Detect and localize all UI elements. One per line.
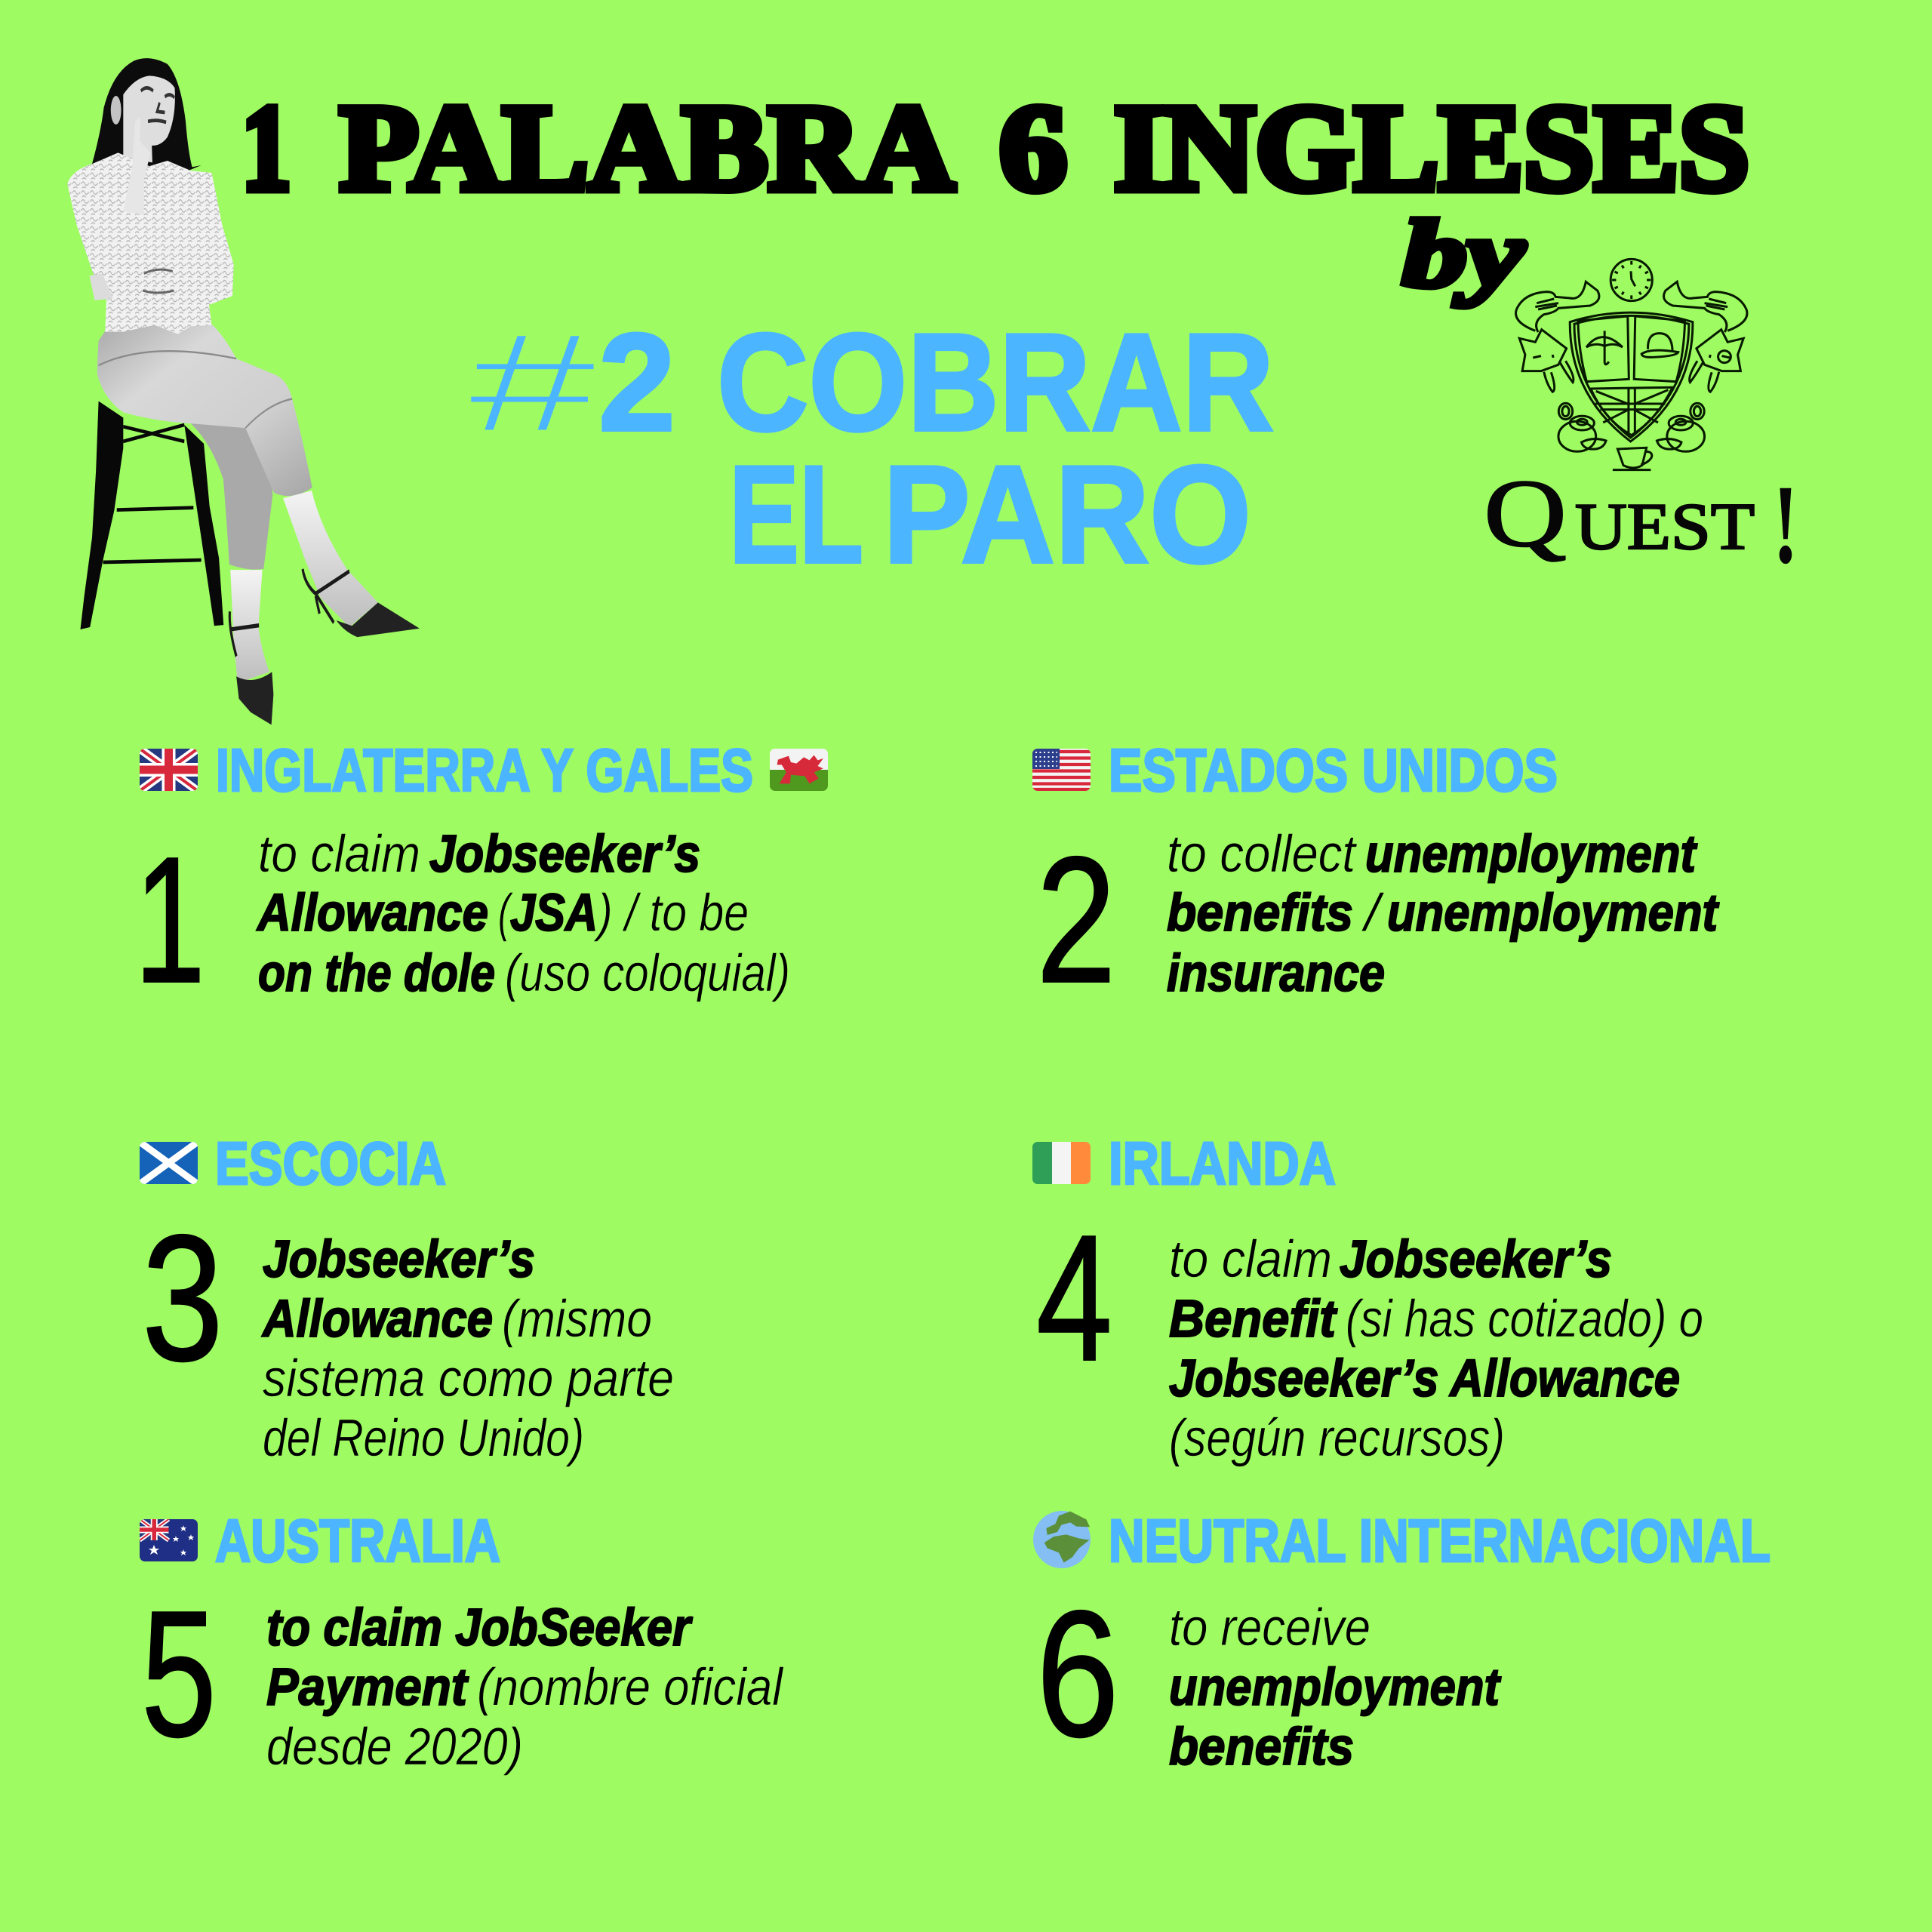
stool (80, 401, 223, 629)
blouse folds (143, 269, 174, 293)
heading: Neutral internacional: NEUTRAL INTERNACIONAL (1109, 1507, 1770, 1574)
foxes (1516, 281, 1599, 392)
shoes (229, 569, 420, 724)
folded hand (90, 273, 113, 300)
title: INGLESES (1114, 80, 1749, 217)
description: ) / to be (593, 883, 749, 942)
logo: Quest crest (1484, 259, 1798, 587)
icon: globe (1033, 1511, 1091, 1568)
subtitle: #2 cobrar el paro: COBRAR (717, 304, 1274, 460)
description: to claim (258, 824, 420, 883)
subtitle: #2 cobrar el paro: # (465, 305, 596, 461)
lace blouse (67, 152, 234, 334)
description: sistema como parte (263, 1349, 674, 1407)
title: PALABRA (340, 80, 955, 217)
by: by (1402, 200, 1526, 307)
title: 6 (999, 80, 1067, 217)
description: desde 2020) (266, 1717, 523, 1776)
legs and feet skin (230, 491, 378, 683)
number 1: 1 (134, 820, 205, 1020)
description: (mismo (502, 1289, 652, 1348)
heading: Inglaterra y Gales: INGLATERRA Y GALES (216, 737, 753, 804)
description: (nombre oficial (477, 1657, 784, 1716)
panel: Inglaterra y Gales (140, 748, 828, 1002)
description: Benefit (1169, 1289, 1337, 1348)
panel: Estados Unidos (1032, 748, 1721, 992)
subtitle: #2 cobrar el paro (465, 304, 1274, 592)
description: benefits (1169, 1717, 1354, 1776)
facial features (141, 88, 174, 122)
description: / (1361, 883, 1385, 942)
description: unemployment (1365, 824, 1697, 883)
heading: Estados Unidos: ESTADOS UNIDOS (1109, 737, 1558, 804)
description (1169, 1229, 1703, 1467)
description: del Reino Unido) (263, 1408, 584, 1467)
subtitle: #2 cobrar el paro: EL (729, 436, 863, 592)
panel: Neutral internacional (1033, 1507, 1770, 1776)
icon: Ireland flag (1032, 1142, 1091, 1184)
number 6: 6 (1036, 1574, 1119, 1774)
trousers (97, 323, 312, 570)
Quest wordmark: UEST (1575, 491, 1755, 564)
heading: Escocia: ESCOCIA (215, 1130, 446, 1197)
number 2: 2 (1036, 820, 1116, 1020)
icon: Wales flag (770, 749, 828, 791)
monocle (1718, 351, 1730, 363)
description: to receive (1169, 1598, 1371, 1657)
panel: Irlanda (1032, 1130, 1703, 1467)
description: Jobseeker’s (429, 824, 700, 883)
woman on a stool illustration (67, 58, 420, 724)
description: (según recursos) (1169, 1408, 1505, 1467)
description (266, 1598, 784, 1776)
description: Jobseeker’s (263, 1229, 535, 1288)
description: JSA (510, 883, 598, 942)
description: (uso coloquial) (505, 943, 790, 1002)
description: to claim JobSeeker (266, 1598, 693, 1657)
subtitle: #2 cobrar el paro: PARO (883, 436, 1251, 592)
description: insurance (1167, 943, 1385, 1002)
description: unemployment (1387, 883, 1719, 942)
teapots (1558, 403, 1606, 451)
description (256, 824, 790, 1002)
hand on chin (123, 117, 150, 215)
description: benefits (1167, 883, 1353, 942)
Quest wordmark: ! (1773, 462, 1798, 587)
description: Allowance (261, 1289, 493, 1348)
icon: Scotland flag (140, 1142, 198, 1184)
face and neck (111, 75, 175, 162)
description: on the dole (258, 943, 495, 1002)
clock (1611, 259, 1652, 301)
description: Jobseeker’s Allowance (1169, 1349, 1680, 1407)
icon: Australia flag (140, 1519, 198, 1561)
title: 1 (242, 80, 291, 217)
crest (1516, 259, 1747, 470)
panel: Escocia (140, 1130, 674, 1467)
icon: US flag (1032, 749, 1091, 791)
description (1169, 1598, 1501, 1776)
number 4: 4 (1036, 1198, 1112, 1398)
heading: Australia: AUSTRALIA (215, 1507, 500, 1574)
umbrella (1586, 331, 1623, 365)
description: (si has cotizado) o (1346, 1289, 1703, 1348)
title (242, 80, 1749, 217)
subtitle: #2 cobrar el paro: 2 (598, 304, 675, 460)
number 5: 5 (141, 1574, 217, 1774)
description (1167, 824, 1719, 1002)
panel: Australia (140, 1507, 784, 1776)
Quest wordmark: Q (1484, 460, 1567, 567)
hair (92, 58, 202, 173)
Quest wordmark (1484, 460, 1798, 587)
description: unemployment (1169, 1657, 1501, 1716)
teacup (1613, 448, 1652, 470)
description: ( (498, 883, 514, 942)
icon: UK flag (140, 749, 198, 791)
description: Jobseeker’s (1340, 1229, 1612, 1288)
shield (1570, 312, 1693, 441)
description: Allowance (256, 883, 488, 942)
description: Payment (266, 1657, 469, 1716)
number 3: 3 (142, 1198, 223, 1398)
description: to collect (1167, 824, 1357, 883)
description (261, 1229, 674, 1467)
bowler hat (1641, 334, 1678, 357)
heading: Irlanda: IRLANDA (1109, 1130, 1336, 1197)
description: to claim (1169, 1229, 1332, 1288)
